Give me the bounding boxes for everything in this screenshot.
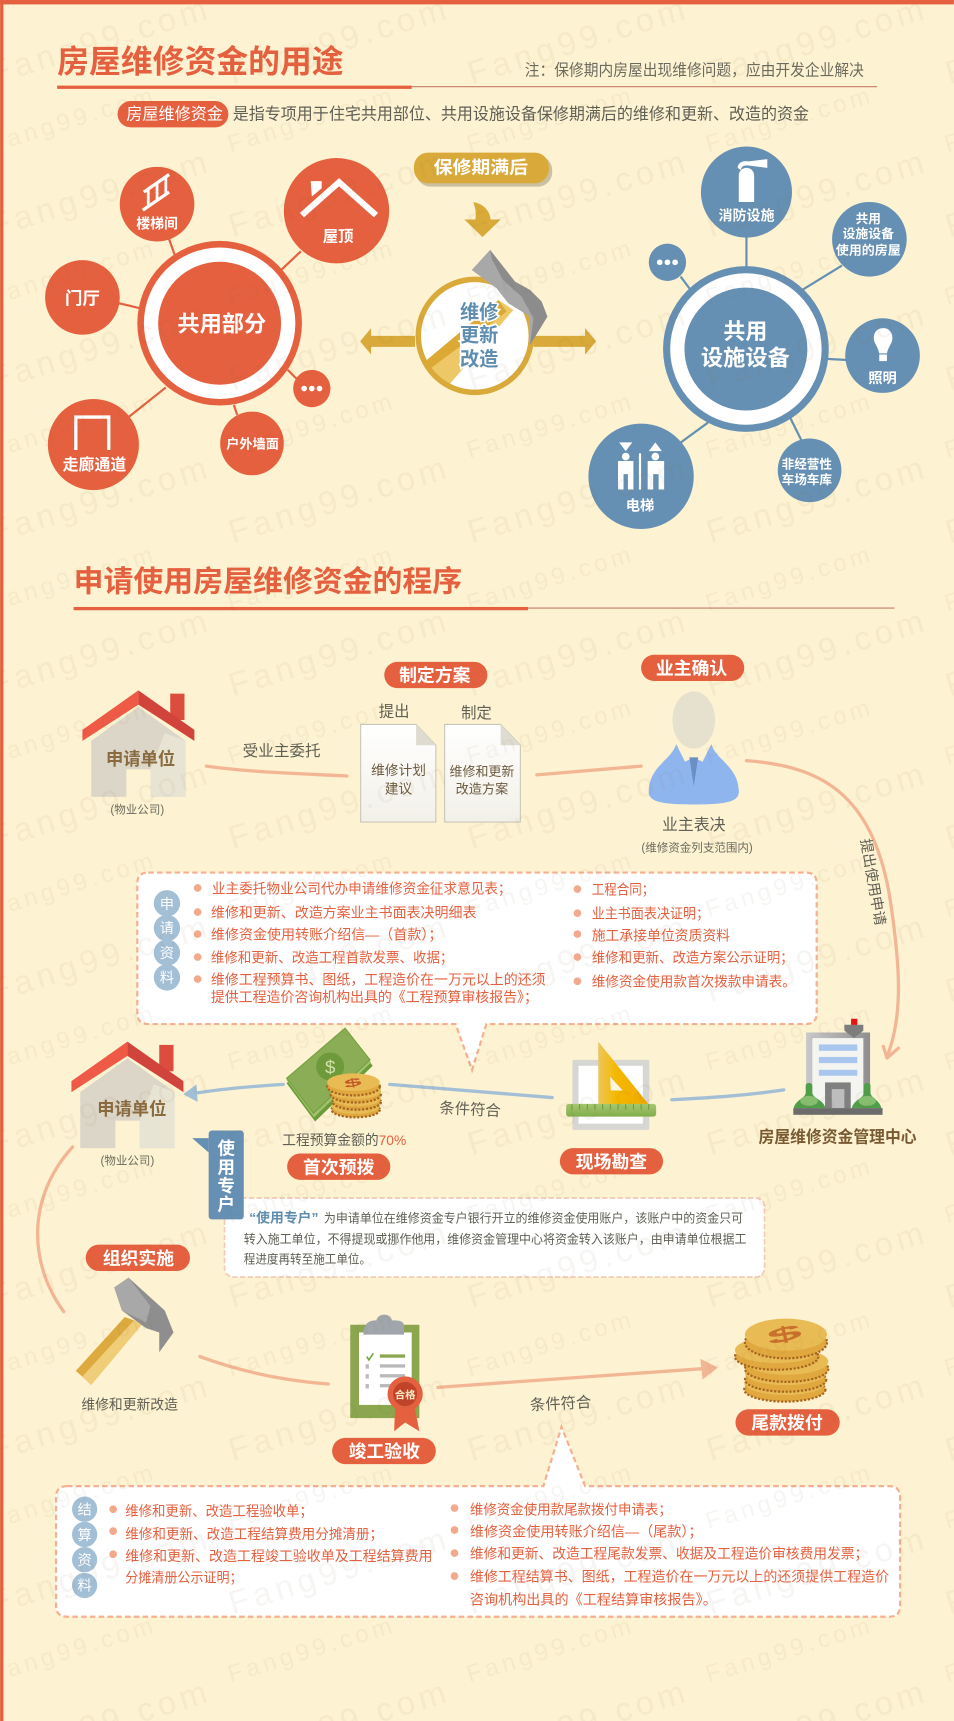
list: right column: 维修资金使用款首次拨款申请表。 — [592, 974, 796, 991]
icon: applicant house second: 申请单位 — [97, 1099, 166, 1119]
icon: applicant house second: (物业公司) — [101, 1154, 154, 1168]
list: left column — [194, 879, 546, 1006]
satellite: roof — [284, 158, 389, 263]
icon: applicant house second — [71, 1042, 183, 1168]
list: left column: 维修和更新、改造工程竣工验收单及工程结算费用 — [125, 1548, 433, 1565]
list: left column: 维修和更新、改造方案业主书面表决明细表 — [211, 904, 476, 922]
list: right column: 维修和更新、改造工程尾款发票、收据及工程造价审核费用发票； — [470, 1546, 868, 1563]
documents: 提出 — [379, 703, 410, 721]
pill: completion acceptance — [332, 1438, 436, 1464]
pill: final payment — [735, 1409, 840, 1436]
satellite: non-commercial parking: 非经营性 — [782, 457, 832, 472]
panel: dedicated account explanation — [225, 1198, 765, 1277]
panel: dedicated account explanation: 为申请单位在维修资金专户银行开立的维修资金使用账户，该账户中的资金只可 — [324, 1211, 743, 1226]
pill: first payment — [287, 1154, 390, 1180]
icon: banknotes and coins: $ — [325, 1056, 336, 1077]
list: left column: 业主委托物业公司代办申请维修资金征求意见表； — [212, 879, 512, 897]
satellite: facility rooms: 使用的房屋 — [836, 243, 901, 258]
labels: application materials: 料 — [160, 969, 174, 986]
circle with hammer: 改造 — [460, 348, 498, 370]
icon: applicant house: 申请单位 — [106, 749, 175, 769]
satellite: non-commercial parking: 车场车库 — [782, 472, 832, 487]
diagram: common parts — [45, 158, 389, 490]
tag: dedicated account: 户 — [217, 1195, 235, 1215]
circle with hammer — [418, 250, 547, 393]
documents: 改造方案 — [456, 782, 508, 797]
documents — [361, 703, 520, 822]
tag: dedicated account: 用 — [217, 1157, 235, 1177]
list: left column: 提供工程造价咨询机构出具的《工程预算审核报告》； — [211, 989, 538, 1006]
arrows: left and right — [360, 328, 596, 355]
list: right column: 业主书面表决证明； — [592, 906, 709, 923]
icon: management centre building — [759, 1019, 917, 1147]
pill: site survey — [560, 1148, 663, 1174]
panel: dedicated account explanation: “使用专户” — [249, 1210, 318, 1226]
pill: final payment: 尾款拨付 — [751, 1413, 823, 1433]
label: 70 percent of budget: 工程预算金额的70% — [282, 1132, 407, 1149]
labels: application materials: 请 — [160, 920, 174, 937]
labels: settlement materials: 结 — [77, 1502, 92, 1519]
pill: warranty expired — [414, 153, 552, 187]
definition sentence: 是指专项用于住宅共用部位、共用设施设备保修期满后的维修和更新、改造的资金 — [233, 106, 809, 124]
satellite: corridor: 走廊通道 — [63, 455, 126, 474]
satellite: elevator — [588, 424, 694, 529]
labels: application materials: 申 — [160, 896, 174, 913]
diagram: shared facilities: 设施设备 — [701, 345, 790, 370]
list: right column: 咨询机构出具的《工程结算审核报告》。 — [470, 1592, 717, 1609]
pill: organise implementation — [86, 1245, 190, 1271]
labels: settlement materials — [72, 1497, 97, 1598]
icon: applicant house — [82, 690, 194, 816]
icon: management centre building: 房屋维修资金管理中心 — [759, 1128, 917, 1147]
title: purpose of maintenance funds: 房屋维修资金的用途 — [57, 43, 344, 79]
satellite: stairwell: 楼梯间 — [136, 214, 178, 232]
flow lines middle — [38, 1084, 784, 1387]
label: entrusted by owners: 受业主委托 — [243, 742, 321, 760]
list: left column: 分摊清册公示证明； — [125, 1570, 243, 1587]
panel: settlement materials — [56, 1427, 900, 1617]
icon: hammer: 维修和更新改造 — [81, 1396, 178, 1413]
icon: owner figure: 业主表决 — [662, 816, 726, 834]
labels: settlement materials: 算 — [77, 1527, 92, 1544]
satellite: corridor — [48, 399, 139, 490]
pill: first payment: 首次预拨 — [303, 1157, 375, 1177]
title: application procedure — [74, 566, 895, 610]
satellite: facility rooms — [832, 202, 907, 277]
list: right column — [451, 1502, 889, 1609]
icon: ruler and set square — [566, 1042, 656, 1130]
flow lines upper — [206, 761, 898, 1058]
list: left column: 维修和更新、改造工程首款发票、收据； — [211, 950, 453, 967]
labels: settlement materials: 资 — [77, 1552, 92, 1569]
satellite: facility rooms: 设施设备 — [842, 226, 894, 241]
icon: banknotes and coins — [287, 1028, 381, 1122]
icon: banknotes and coins: $ — [343, 1075, 363, 1091]
satellite: lobby — [45, 260, 120, 335]
satellite: exterior wall: 户外墙面 — [226, 435, 279, 451]
list: right column: 维修和更新、改造方案公示证明； — [592, 949, 794, 967]
list: left column: 维修资金使用转账介绍信—（首款）； — [211, 927, 442, 944]
icon: owner figure — [641, 691, 753, 855]
satellite: exterior wall — [220, 412, 284, 475]
satellite: elevator: 电梯 — [626, 496, 654, 514]
definition sentence: 房屋维修资金 — [126, 106, 223, 124]
satellite: fire equipment — [701, 147, 792, 238]
satellite: non-commercial parking — [778, 438, 841, 502]
label: conditions met: 条件符合 — [529, 1393, 592, 1414]
icon: clipboard with seal — [350, 1315, 423, 1431]
diagram: shared facilities: 共用 — [723, 319, 767, 344]
list: right column: 维修资金使用转账介绍信—（尾款）； — [470, 1524, 703, 1541]
documents: 维修和更新 — [450, 764, 514, 779]
satellite: lighting — [845, 318, 920, 393]
list: left column: 维修工程预算书、图纸，工程造价在一万元以上的还须 — [211, 972, 546, 989]
arrow: down — [464, 202, 501, 237]
tag: dedicated account — [192, 1131, 244, 1219]
tag: dedicated account: 专 — [217, 1176, 235, 1196]
pill: owner confirmation — [641, 655, 744, 681]
satellite: stairwell — [120, 167, 194, 241]
circle with hammer: 维修 — [460, 301, 498, 323]
list: right column: 维修工程结算书、图纸，工程造价在一万元以上的还须提供工程造价 — [470, 1569, 889, 1586]
list: right column: 维修资金使用款尾款拨付申请表； — [470, 1502, 672, 1519]
diagram: common parts: 共用部分 — [177, 311, 266, 336]
diagram: shared facilities — [588, 147, 920, 529]
centre: after warranty repair badge — [360, 153, 596, 393]
definition sentence — [118, 101, 809, 127]
icon: coin stack — [735, 1319, 828, 1402]
circle with hammer: 更新 — [460, 324, 498, 346]
satellite: fire equipment: 消防设施 — [718, 208, 774, 224]
title: application procedure: 申请使用房屋维修资金的程序 — [74, 566, 462, 599]
list: right column: 施工承接单位资质资料 — [592, 928, 730, 945]
icon: clipboard with seal: 合格 — [395, 1388, 416, 1401]
pill: owner confirmation: 业主确认 — [656, 658, 728, 678]
list: left column — [109, 1503, 433, 1587]
labels: settlement materials: 料 — [77, 1577, 92, 1594]
pill: organise implementation: 组织实施 — [103, 1248, 175, 1268]
panel: dedicated account explanation: 程进度再转至施工单位。 — [244, 1251, 371, 1266]
list: left column: 维修和更新、改造工程结算费用分摊清册； — [125, 1526, 383, 1543]
satellite: facility rooms: 共用 — [856, 212, 881, 226]
pill: plan: 制定方案 — [399, 666, 471, 686]
pill: completion acceptance: 竣工验收 — [349, 1442, 420, 1462]
documents: 维修计划 — [371, 763, 426, 778]
label: submit application: 提出使用申请 — [857, 837, 889, 927]
panel: dedicated account explanation: 转入施工单位，不得提现或挪作他用，维修资金管理中心将资金转入该账户，由申请单位根据工 — [244, 1232, 746, 1247]
satellite: roof: 屋顶 — [323, 228, 354, 245]
list: right column — [574, 882, 796, 991]
satellite: more — [293, 370, 330, 407]
tag: dedicated account: 使 — [217, 1139, 235, 1159]
note: warranty period: 注：保修期内房屋出现维修问题，应由开发企业解决 — [525, 61, 864, 80]
documents: 制定 — [461, 704, 492, 722]
list: left column: 维修和更新、改造工程验收单； — [125, 1503, 313, 1520]
icon: applicant house: (物业公司) — [110, 802, 164, 816]
icon: hammer — [76, 1278, 178, 1413]
documents: 建议 — [385, 782, 413, 797]
pill: warranty expired: 保修期满后 — [434, 157, 528, 177]
pill: site survey: 现场勘查 — [576, 1152, 648, 1172]
list: right column: 工程合同； — [592, 882, 654, 899]
satellite: lobby: 门厅 — [65, 289, 100, 309]
icon: coin stack: $ — [765, 1319, 804, 1350]
labels: application materials — [154, 890, 180, 991]
label: conditions met: 条件符合 — [439, 1099, 501, 1120]
satellite: lighting: 照明 — [868, 370, 897, 387]
pill: plan — [384, 662, 487, 688]
icon: owner figure: (维修资金列支范围内) — [641, 841, 753, 855]
panel: application materials — [137, 873, 817, 1070]
title: purpose of maintenance funds — [57, 43, 877, 89]
labels: application materials: 资 — [160, 945, 174, 962]
satellite: more — [649, 244, 686, 281]
